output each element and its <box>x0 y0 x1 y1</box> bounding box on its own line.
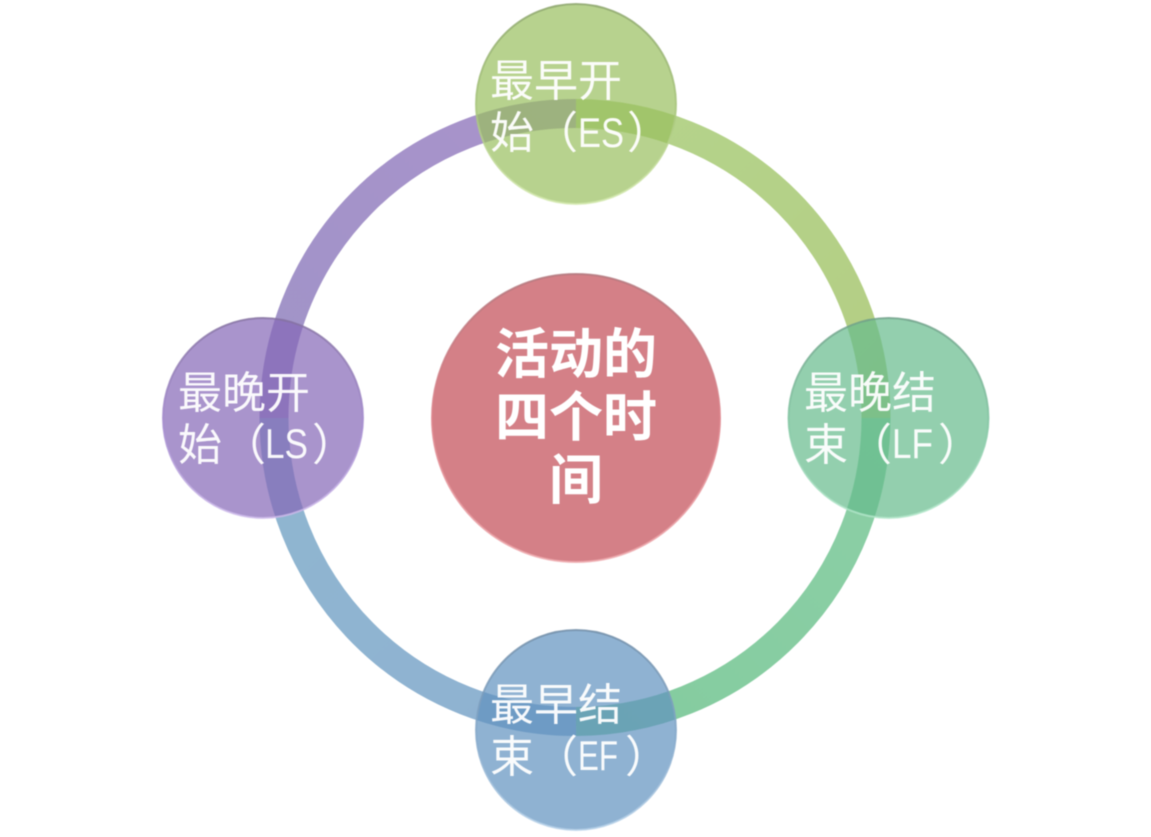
LF label: ） <box>938 409 982 473</box>
LS label: LS <box>265 420 308 467</box>
node: LF latest finish <box>788 318 988 518</box>
ring arc: LF to EF <box>576 418 876 722</box>
ring arc: EF to LS <box>274 418 576 722</box>
ES label: ） <box>627 97 671 161</box>
LS label: 最晚开 <box>178 357 310 421</box>
ES label: 最早开 <box>490 45 622 109</box>
node: EF earliest finish <box>476 630 676 830</box>
center label: 活动的 <box>495 310 657 389</box>
ES label: ES <box>578 109 624 156</box>
ES label: 始（ <box>490 97 578 161</box>
LF label: LF <box>892 420 933 467</box>
node: LS latest start <box>163 318 363 518</box>
LS label: ） <box>312 409 356 473</box>
node: ES earliest start <box>476 4 676 204</box>
EF label: EF <box>578 732 618 779</box>
center label: 间 <box>549 436 603 515</box>
EF label: ） <box>625 721 669 785</box>
LF label: 最晚结 <box>804 357 936 421</box>
EF label: 最早结 <box>490 669 622 733</box>
LF label: 束（ <box>804 409 892 473</box>
center node: 活动的四个时间 <box>432 274 720 562</box>
center label: 四个时 <box>495 373 657 452</box>
EF label: 束（ <box>490 721 578 785</box>
ring: connecting cycle <box>274 113 876 722</box>
ring arc: ES to LF <box>576 114 876 418</box>
ring arc: LS to ES <box>274 113 576 418</box>
LS label: 始（ <box>178 409 266 473</box>
